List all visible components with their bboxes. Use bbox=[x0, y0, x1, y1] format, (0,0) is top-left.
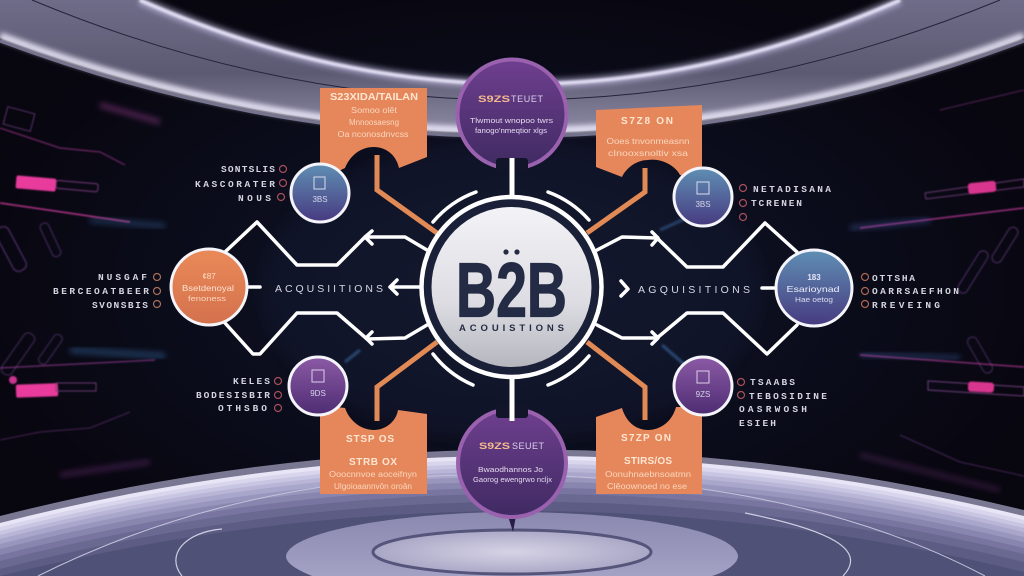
list: top right: TCRENEN bbox=[751, 198, 802, 209]
circle: left orange bbox=[171, 249, 247, 325]
circle: right blue: 183 bbox=[807, 273, 821, 282]
list: top left bbox=[195, 164, 286, 204]
circle: left orange: Bsetdenoyal bbox=[182, 283, 234, 293]
list: bottom left: OTHSBO bbox=[218, 403, 267, 414]
white connectors left bbox=[225, 222, 427, 354]
list: left: NUSGAF bbox=[98, 272, 147, 283]
circle: bottom purple: SEUET bbox=[512, 441, 544, 451]
acquisitions label left: ACQUSIITIONS bbox=[275, 283, 383, 295]
list: right: OARRSAEFHON bbox=[872, 286, 959, 297]
list: bottom right: TSAABS bbox=[750, 377, 795, 388]
panel: top right orange: cInooxsnoltiv xsa bbox=[608, 149, 689, 158]
panel: bottom left orange: STSP OS bbox=[346, 434, 394, 445]
circle: left orange: fenoness bbox=[188, 294, 226, 303]
list: top right bbox=[740, 184, 831, 220]
hub subtitle: ACOUISTIONS bbox=[459, 323, 564, 334]
circle: right blue: Hae oetog bbox=[795, 295, 833, 304]
circle: small top left bbox=[291, 164, 349, 222]
circle: top purple: S9ZS bbox=[478, 94, 510, 105]
list: bottom right: TEBOSIDINE bbox=[749, 391, 827, 402]
circuit decoration: left bbox=[0, 105, 165, 475]
panel: top left orange: Oa nconosdnvcss bbox=[338, 130, 408, 139]
circle: bottom purple: Gaorog ewengrwo ncljx bbox=[473, 475, 552, 484]
circle: bottom purple: S9ZS bbox=[479, 441, 510, 452]
acquisitions label right: AGQUISITIONS bbox=[638, 284, 750, 296]
panel: bottom right orange: STIRS/OS bbox=[624, 456, 672, 467]
circle: bottom purple bbox=[458, 377, 566, 532]
white connectors right bbox=[597, 223, 797, 354]
ceiling ring bbox=[0, 0, 1024, 136]
circle: top purple: fanogo'nmeqtior xlgs bbox=[475, 126, 547, 135]
circle: small top right bbox=[674, 168, 732, 226]
center circuit glow bbox=[262, 140, 762, 440]
list: right bbox=[862, 273, 959, 311]
list: bottom right bbox=[738, 377, 827, 429]
panel: bottom left orange bbox=[320, 405, 427, 494]
panel: top left orange: Mnnoosaesng bbox=[349, 118, 399, 127]
panel: bottom right orange bbox=[596, 407, 702, 494]
circle: small top right: 3BS bbox=[695, 200, 711, 209]
list: bottom right: OASRWOSH bbox=[739, 404, 807, 415]
circle: small bottom right bbox=[674, 357, 732, 415]
list: top right: NETADISANA bbox=[753, 184, 831, 195]
orange connectors bbox=[377, 155, 645, 421]
hub title: B2B bbox=[456, 248, 567, 334]
circle: left orange: ¢87 bbox=[202, 272, 216, 281]
panel: top left orange: Somoo olêt bbox=[351, 106, 398, 115]
panel: bottom right orange: Oonuhnaebnsoatmn bbox=[605, 470, 691, 479]
panel: bottom right orange: S7ZP ON bbox=[621, 433, 671, 444]
circle: right blue: Esarioynad bbox=[786, 284, 840, 294]
list: bottom left bbox=[196, 376, 282, 414]
panel: bottom right orange: Clêoownoed no ese bbox=[607, 482, 688, 491]
list: bottom left: KELES bbox=[233, 376, 270, 387]
center hub bbox=[422, 192, 602, 385]
panel: top left orange: S23XIDA/TAILAN bbox=[330, 92, 418, 103]
circle: top purple bbox=[458, 60, 566, 199]
panel: top right orange: S7Z8 ON bbox=[621, 116, 673, 127]
list: left: SVONSBIS bbox=[92, 300, 148, 311]
circle: right blue bbox=[776, 250, 852, 326]
circle: small bottom left: 9DS bbox=[310, 389, 326, 398]
circle: small bottom left bbox=[289, 357, 347, 415]
list: top left: SONTSLIS bbox=[221, 164, 275, 175]
panel: top right orange: Ooes tnvonmeasnn bbox=[606, 137, 690, 146]
circle: small top left: 3BS bbox=[312, 195, 328, 204]
list: left: BERCEOATBEER bbox=[53, 286, 149, 297]
list: right: RREVEING bbox=[872, 300, 940, 311]
list: top left: NOUS bbox=[238, 193, 271, 204]
list: left bbox=[53, 272, 160, 311]
panel: top right orange bbox=[596, 105, 702, 180]
circle: top purple: TEUET bbox=[511, 94, 544, 104]
panel: bottom left orange: Ulgoioaannvôn oroân bbox=[334, 482, 412, 491]
circle: small bottom right: 9ZS bbox=[696, 390, 710, 399]
list: bottom left: BODESISBIR bbox=[196, 390, 270, 401]
panel: bottom left orange: Ooocnnvoe aoceifnyn bbox=[329, 470, 417, 479]
list: bottom right: ESIEH bbox=[739, 418, 776, 429]
circle: top purple: Tlwmout wnopoo twrs bbox=[470, 116, 553, 125]
list: top left: KASCORATER bbox=[195, 179, 275, 190]
list: right: OTTSHA bbox=[872, 273, 915, 284]
floor bbox=[0, 449, 1024, 576]
panel: bottom left orange: STRB OX bbox=[349, 457, 397, 468]
circle: bottom purple: Bwaodhannos Jo bbox=[478, 465, 543, 474]
panel: top left orange bbox=[320, 88, 427, 180]
circuit decoration: right bbox=[850, 90, 1024, 490]
